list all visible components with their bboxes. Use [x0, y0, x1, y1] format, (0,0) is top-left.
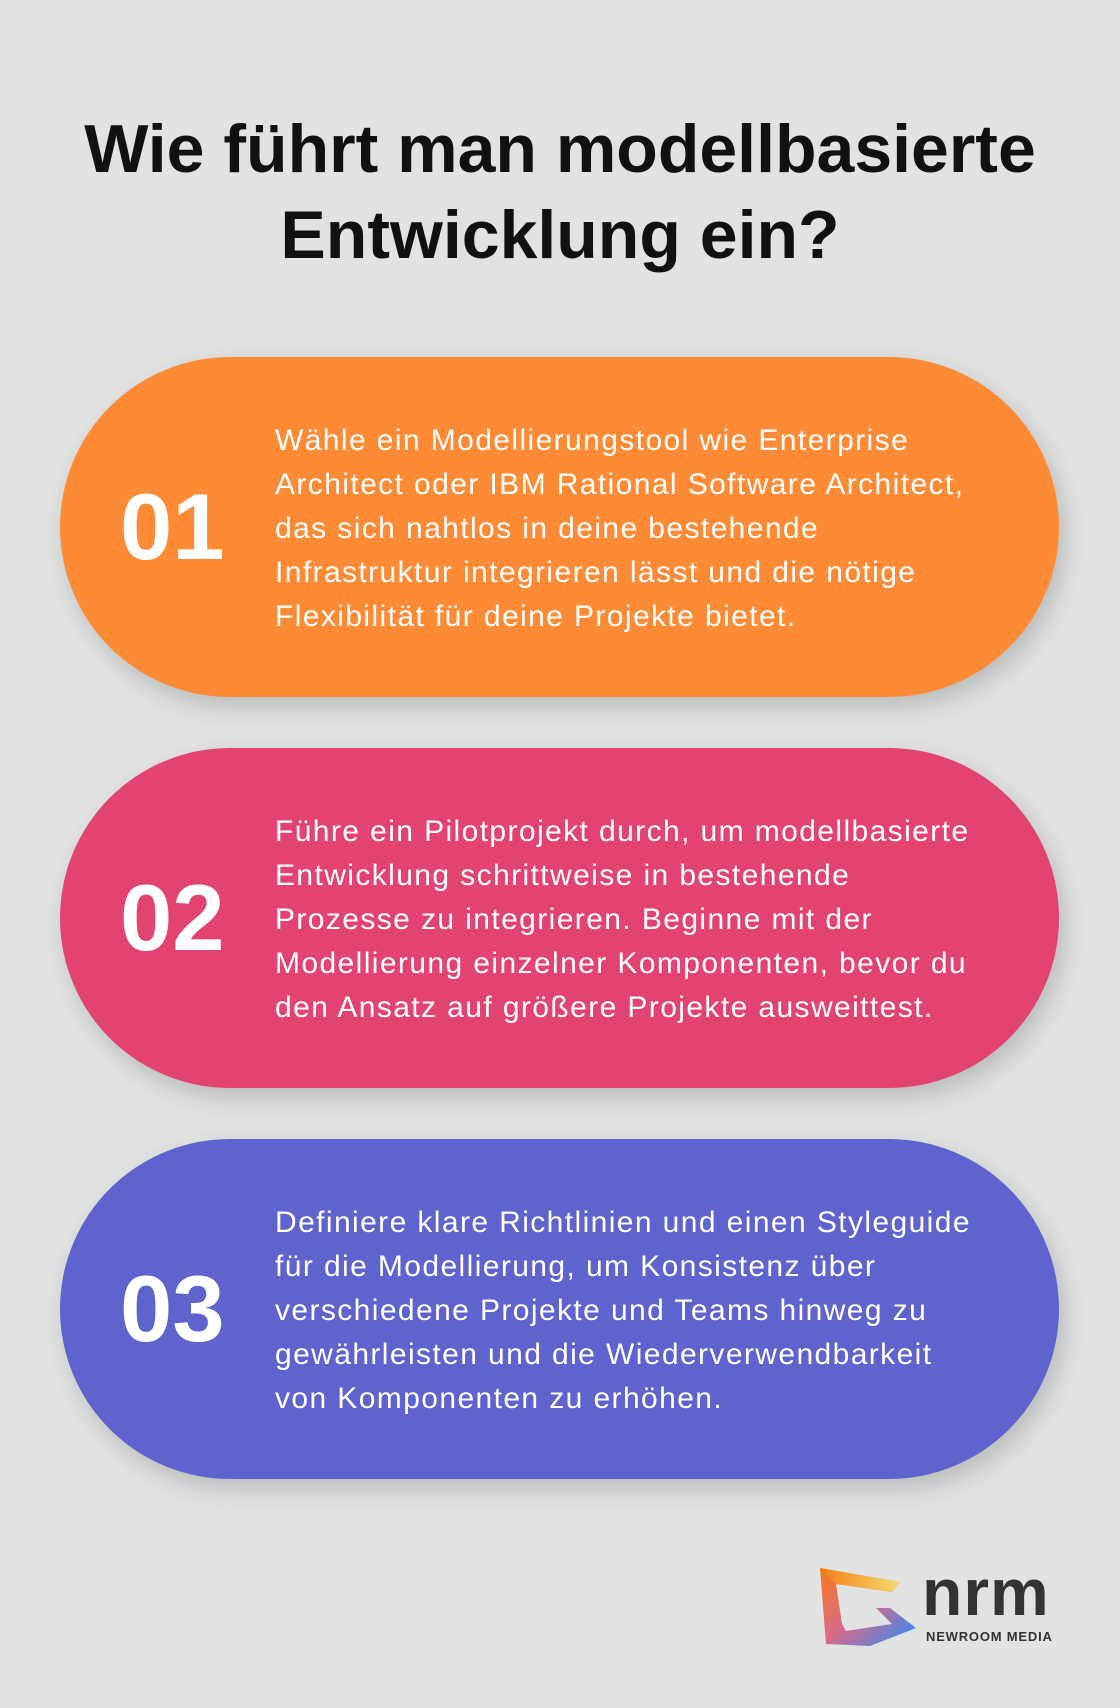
logo text: nrm — [922, 1555, 1050, 1629]
number 03: 03 — [120, 1256, 225, 1361]
text 03: Definiere klare Richtlinien und einen Styleguide — [275, 1206, 971, 1239]
text 02: Prozesse zu integrieren. Beginne mit der — [275, 903, 873, 936]
panel: step 02 — [60, 748, 1059, 1088]
text 02: Führe ein Pilotprojekt durch, um modellbasierte — [275, 815, 969, 848]
panel: step 01 — [60, 357, 1059, 697]
text 01: das sich nahtlos in deine bestehende — [275, 512, 819, 545]
logo: NEWROOM MEDIA — [926, 1629, 1053, 1644]
text 01: Flexibilität für deine Projekte bietet. — [275, 600, 797, 633]
number 02: 02 — [120, 865, 225, 970]
text 01: Infrastruktur integrieren lässt und die nötige — [275, 556, 916, 589]
text 01 — [275, 424, 964, 633]
text 03: für die Modellierung, um Konsistenz über — [275, 1250, 876, 1283]
text 01: Architect oder IBM Rational Software Architect, — [275, 468, 964, 501]
logo — [820, 1555, 1053, 1646]
number 01: 01 — [120, 474, 225, 579]
title — [84, 111, 1036, 273]
title: Wie führt man modellbasierte — [84, 111, 1036, 187]
icon: logo mark — [820, 1568, 916, 1646]
text 02: Entwicklung schrittweise in bestehende — [275, 859, 850, 892]
panel: step 03 — [60, 1139, 1059, 1479]
text 03: von Komponenten zu erhöhen. — [275, 1382, 723, 1415]
title: Entwicklung ein? — [280, 197, 840, 273]
text 02 — [275, 815, 969, 1024]
text 02: den Ansatz auf größere Projekte ausweittest. — [275, 991, 934, 1024]
text 03: gewährleisten und die Wiederverwendbarkeit — [275, 1338, 932, 1371]
text 01: Wähle ein Modellierungstool wie Enterprise — [275, 424, 909, 457]
text 03: verschiedene Projekte und Teams hinweg zu — [275, 1294, 927, 1327]
text 02: Modellierung einzelner Komponenten, bevor du — [275, 947, 967, 980]
text 03 — [275, 1206, 971, 1415]
